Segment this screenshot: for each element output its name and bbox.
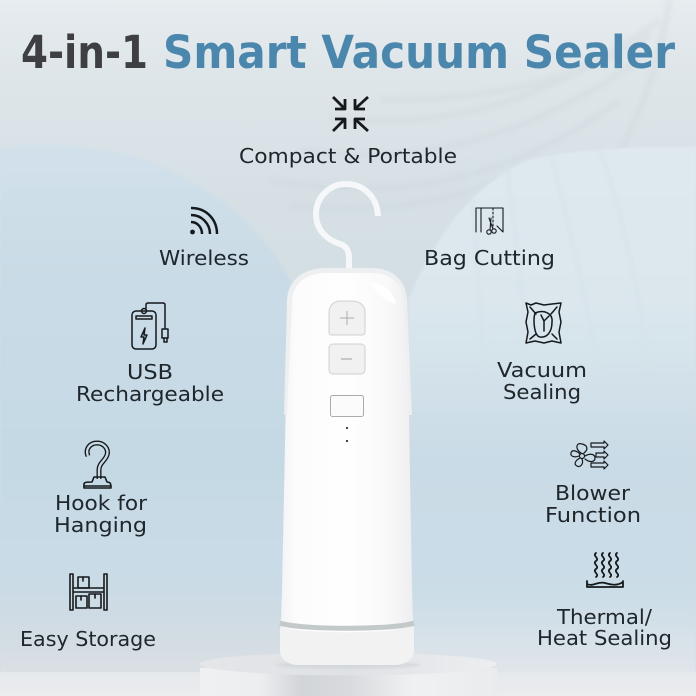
plus button (329, 301, 365, 335)
feature: usb rechargeable (76, 303, 224, 406)
feature: vacuum sealing: Vacuum (497, 358, 587, 382)
feature: compact and portable (239, 97, 457, 168)
hook (316, 184, 378, 270)
minus button (329, 344, 365, 374)
feature: hook for hanging: Hanging (54, 513, 147, 537)
square button (330, 396, 364, 416)
title: 4-in-1 (21, 26, 148, 79)
feature: hook for hanging (54, 443, 148, 537)
feature: easy storage (20, 574, 156, 651)
product: vacuum sealer (280, 184, 414, 665)
title: Smart Vacuum Sealer (163, 26, 676, 79)
feature: hook for hanging: Hook for (55, 491, 148, 515)
gloss highlight (371, 283, 396, 304)
feature: bag cutting (424, 208, 555, 270)
feature: blower function: Blower (555, 481, 631, 505)
feature: usb rechargeable: Rechargeable (76, 382, 224, 406)
feature: easy storage: Easy Storage (20, 627, 156, 651)
pedestal (200, 652, 497, 696)
feature: thermal heat sealing: Thermal/ (556, 605, 652, 629)
feature: bag cutting: Bag Cutting (424, 246, 555, 270)
feature: compact and portable: Compact & Portable (239, 144, 457, 168)
feature: wireless: Wireless (159, 246, 249, 270)
feature: thermal heat sealing (537, 553, 672, 650)
feature: vacuum sealing (497, 303, 587, 404)
feature: usb rechargeable: USB (127, 360, 173, 384)
feature: thermal heat sealing: Heat Sealing (537, 626, 672, 650)
feature: vacuum sealing: Sealing (503, 380, 581, 404)
feature: blower function (545, 441, 641, 527)
feature: wireless (159, 208, 249, 270)
device body (280, 270, 414, 665)
feature: blower function: Function (545, 503, 641, 527)
indicator dots (346, 427, 348, 442)
sleeve (284, 268, 412, 415)
